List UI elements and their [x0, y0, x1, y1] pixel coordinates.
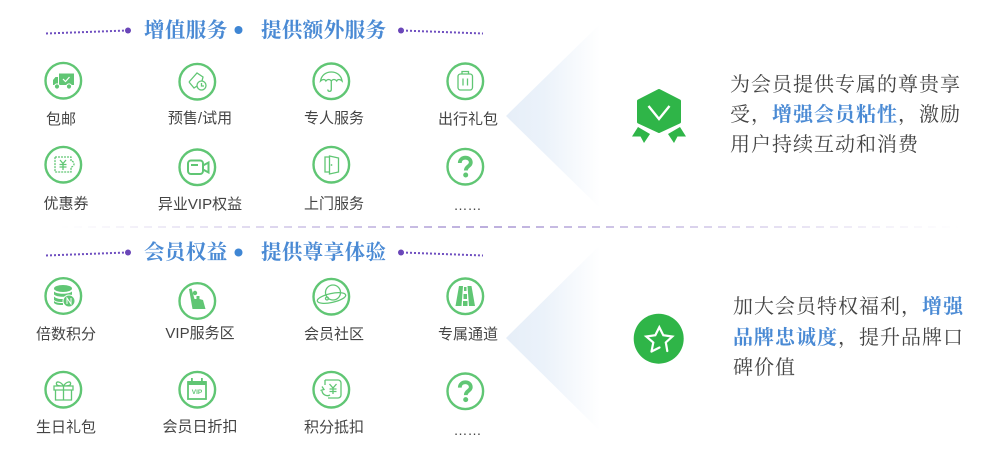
item: cross-industry VIP benefits — [158, 150, 242, 213]
heading: member benefits: 提供尊享体验 — [261, 240, 386, 264]
icon: ribbon badge — [632, 90, 686, 143]
item: cross-industry VIP benefits: 异业VIP权益 — [158, 196, 242, 213]
item: member community — [304, 279, 364, 343]
heading: member benefits: 会员权益 — [144, 241, 228, 264]
panel: member benefits — [36, 240, 498, 438]
item: free shipping: 包邮 — [46, 111, 76, 128]
item: points deduction: 积分抵扣 — [304, 419, 364, 436]
panel: value-added services — [43, 18, 498, 213]
text: loyalty description: 用户持续互动和消费 — [730, 133, 919, 156]
item: birthday gift — [36, 372, 96, 436]
item: member day discount: VIP — [192, 389, 203, 396]
item: member day discount: 会员日折扣 — [162, 418, 238, 436]
item: door-to-door service: 上门服务 — [304, 196, 364, 212]
text: reputation description: 品牌忠诚度，提升品牌口 — [733, 327, 964, 349]
item: member day discount — [162, 372, 238, 436]
item: multiple points: 倍数积分 — [36, 326, 96, 343]
icon: star badge — [634, 314, 684, 364]
item: multiple points — [36, 278, 96, 343]
item: presale / trial — [168, 64, 232, 127]
text: reputation description: 加大会员特权福利，增强 — [733, 296, 964, 318]
arrow: gradient pointer — [506, 245, 600, 431]
divider — [60, 226, 960, 228]
item: points deduction — [304, 372, 364, 436]
heading: value-added services: 提供额外服务 — [261, 18, 386, 42]
item: member community: 会员社区 — [304, 326, 364, 343]
item: exclusive channel: 专属通道 — [438, 326, 498, 343]
item: coupon — [43, 147, 89, 212]
item: birthday gift: 生日礼包 — [36, 419, 96, 436]
item: travel package — [438, 64, 498, 128]
item: coupon: 优惠券 — [43, 196, 89, 212]
item: dedicated service: 专人服务 — [304, 110, 364, 127]
text: loyalty description: 受，增强会员粘性，激励 — [730, 104, 961, 126]
item: more (question mark) — [448, 374, 483, 438]
item: dedicated service — [304, 64, 364, 127]
item: more (question mark): …… — [454, 197, 482, 213]
item: exclusive channel — [438, 278, 498, 343]
item: presale / trial: 预售/试用 — [168, 110, 232, 127]
item: more (question mark) — [448, 149, 483, 213]
panel: reputation callout — [506, 245, 970, 431]
item: VIP lounge: VIP服务区 — [165, 325, 235, 342]
item: more (question mark): …… — [454, 422, 482, 438]
item: VIP lounge — [165, 283, 235, 342]
item: travel package: 出行礼包 — [438, 111, 498, 128]
heading: value-added services — [46, 18, 483, 42]
arrow: gradient pointer — [506, 24, 600, 208]
panel: loyalty callout — [506, 24, 967, 208]
text: loyalty description: 为会员提供专属的尊贵享 — [730, 73, 961, 96]
heading: member benefits — [46, 240, 483, 264]
item: door-to-door service — [304, 147, 364, 212]
text: reputation description: 碑价值 — [733, 356, 796, 379]
item: free shipping — [46, 63, 81, 128]
heading: value-added services: 增值服务 — [144, 19, 228, 42]
